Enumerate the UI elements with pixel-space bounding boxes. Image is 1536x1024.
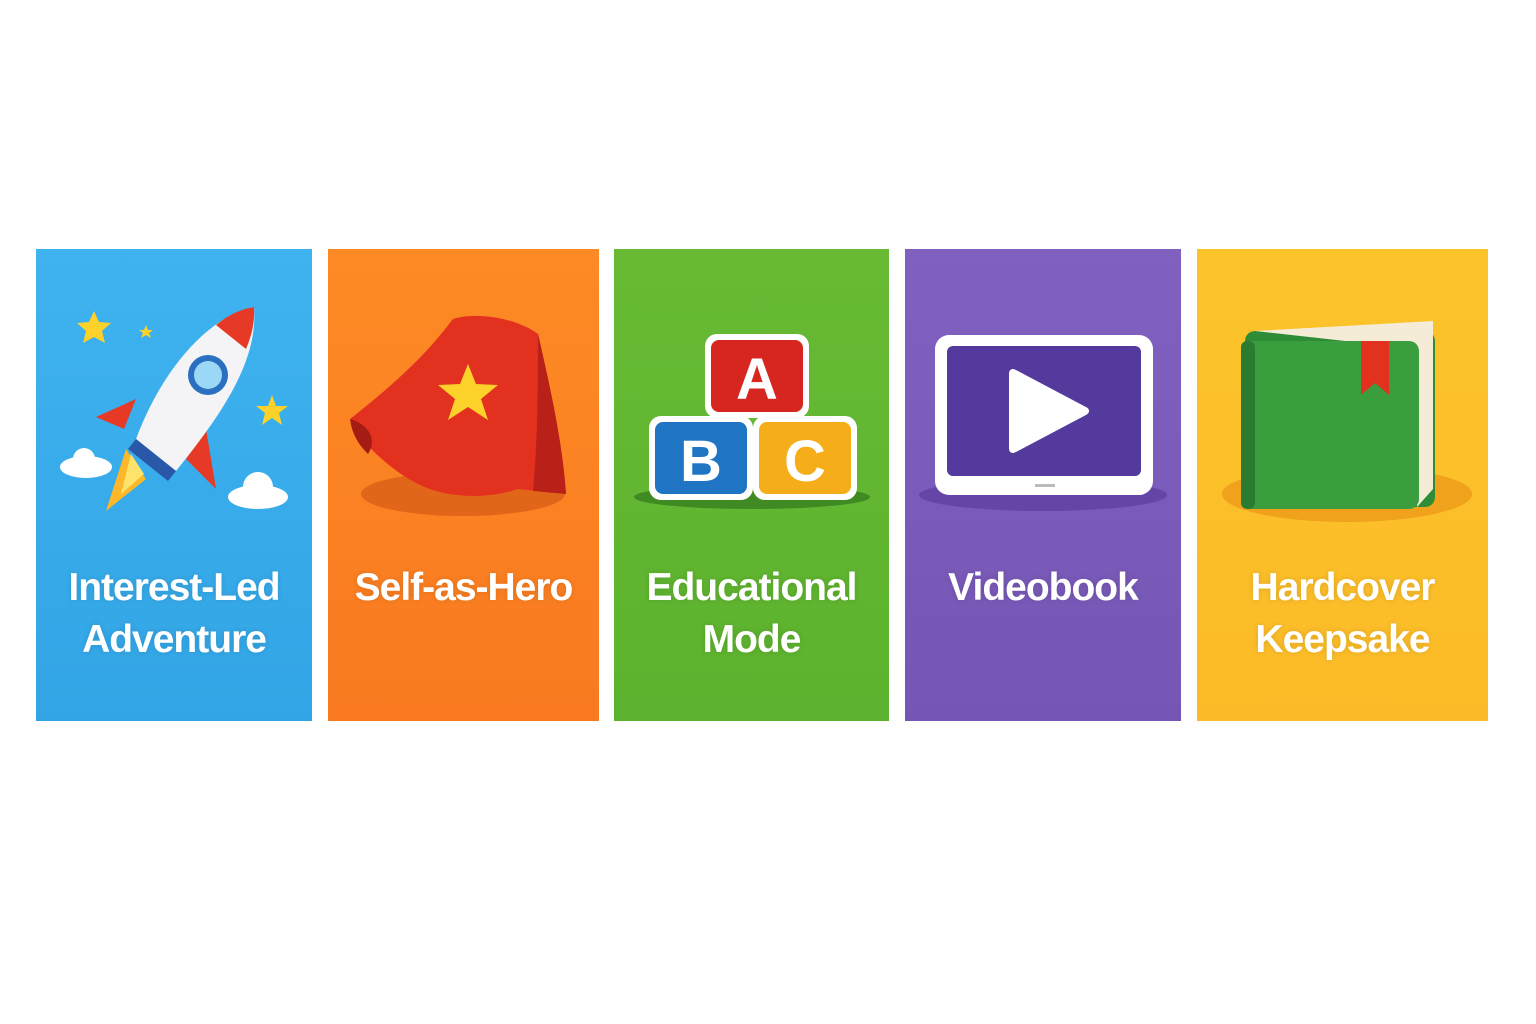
panel: self-as-hero: [328, 249, 599, 721]
icon: abc blocks: B: [680, 429, 722, 494]
panel: educational mode: Educational: [646, 566, 857, 609]
panel: interest-led adventure: Interest-Led: [68, 566, 280, 609]
icon: green book: [1222, 321, 1472, 522]
icon: tablet play: [919, 335, 1167, 511]
icon: cape: [350, 316, 566, 516]
panel: educational mode: [614, 249, 889, 721]
panel: interest-led adventure: [36, 249, 312, 721]
panel: videobook: [905, 249, 1181, 721]
icon: rocket: [60, 307, 288, 511]
icon: abc blocks: [634, 334, 870, 509]
panel: hardcover keepsake: Keepsake: [1255, 618, 1430, 661]
panel: educational mode: Mode: [703, 618, 800, 661]
panel: hardcover keepsake: Hardcover: [1251, 566, 1434, 609]
panel: videobook: Videobook: [948, 566, 1138, 609]
panel: self-as-hero: Self-as-Hero: [355, 566, 572, 609]
panel: interest-led adventure: Adventure: [82, 618, 266, 661]
icon: abc blocks: C: [784, 429, 826, 494]
panel: hardcover keepsake: [1197, 249, 1488, 721]
icon: abc blocks: A: [736, 347, 778, 412]
